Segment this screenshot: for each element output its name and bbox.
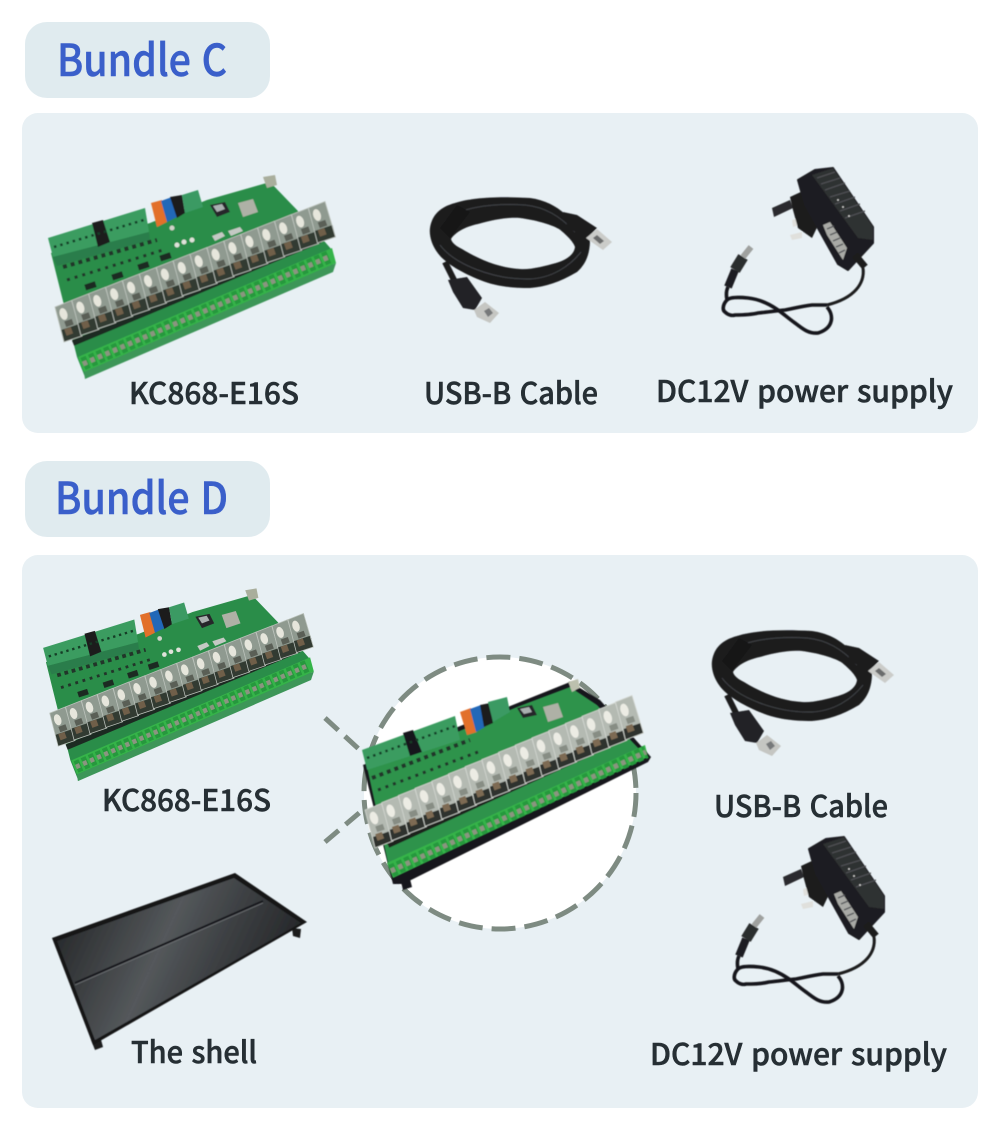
cut-away guide lines (325, 718, 365, 842)
product image: KC868-E16S relay board (43, 588, 314, 781)
black shell under the board (363, 682, 651, 890)
board on shell (362, 679, 648, 878)
label: USB-B Cable: USB-B Cable (424, 369, 598, 413)
product image: black metal shell (52, 873, 307, 1050)
product image: USB-B cable (430, 197, 612, 323)
product image: KC868-E16S relay board (48, 175, 336, 379)
label: DC12V power supply: DC12V power supply (650, 1030, 947, 1074)
dashed circle (364, 657, 636, 929)
heading text: Bundle D: Bundle D (55, 463, 228, 527)
label: KC868-E16S: KC868-E16S (102, 776, 271, 820)
label: KC868-E16S: KC868-E16S (129, 369, 299, 413)
label: DC12V power supply: DC12V power supply (656, 367, 953, 411)
panel: Bundle C contents (22, 113, 978, 433)
assembly view: board mounted on shell inside dashed circle (325, 657, 651, 929)
panel: Bundle D contents (22, 555, 978, 1108)
product image: DC12V power adapter (734, 837, 884, 1002)
heading text: Bundle C: Bundle C (57, 25, 227, 89)
product image: DC12V power adapter (723, 168, 873, 333)
heading pill: Bundle C (25, 22, 270, 98)
heading pill: Bundle D (25, 461, 270, 537)
label: The shell: The shell (131, 1028, 257, 1072)
product image: USB-B cable (712, 630, 894, 756)
label: USB-B Cable: USB-B Cable (714, 782, 888, 826)
